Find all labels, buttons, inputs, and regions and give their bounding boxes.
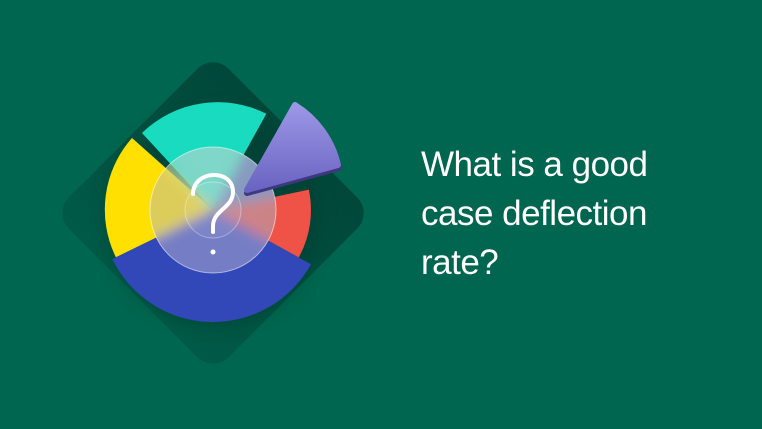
icon: question mark <box>193 175 233 254</box>
segment: purple pulled-out slice <box>247 108 339 193</box>
diamond background <box>53 53 373 373</box>
donut segments <box>105 102 339 326</box>
title text: case deflection <box>421 194 647 233</box>
title text: rate? <box>421 243 498 282</box>
segment: teal <box>142 102 266 210</box>
title text <box>421 145 647 282</box>
glass circle <box>150 147 276 273</box>
segment: yellow <box>105 138 213 257</box>
segment: blue <box>112 210 311 322</box>
title text: What is a good <box>421 145 647 184</box>
illustration: donut chart with question mark <box>62 62 364 364</box>
segment: red <box>213 190 311 258</box>
